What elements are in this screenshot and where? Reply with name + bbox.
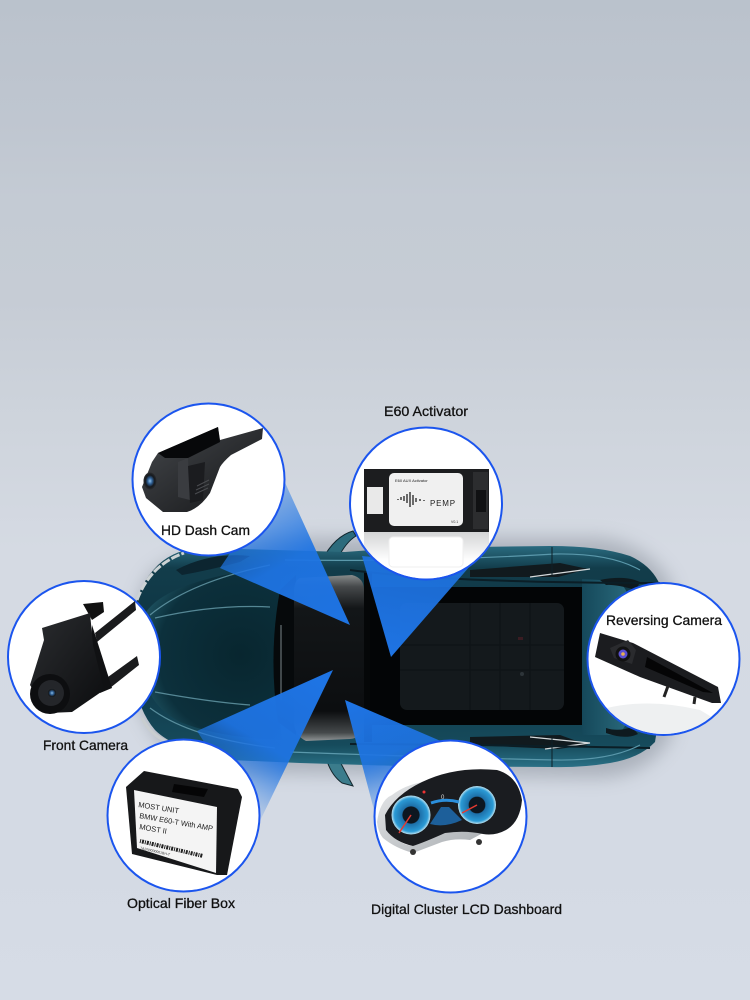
cluster housing (385, 769, 522, 846)
label: E60 Activator (384, 403, 468, 419)
circle (350, 428, 502, 580)
icon: dash cam (142, 427, 263, 512)
panel: Reversing Camera (588, 583, 740, 740)
circle (132, 404, 284, 556)
circle (108, 740, 260, 892)
label: Optical Fiber Box (127, 895, 235, 911)
icon: fiber box: MOST II (139, 822, 168, 836)
roof pillar (364, 572, 372, 742)
panel: Digital Cluster LCD Dashboard (371, 740, 562, 917)
beam: HD Dash Cam (220, 476, 350, 625)
label: HD Dash Cam (161, 522, 250, 538)
label: Front Camera (43, 737, 128, 753)
icon: front camera (30, 601, 139, 714)
label: Digital Cluster LCD Dashboard (371, 901, 562, 917)
wiper area (273, 575, 296, 735)
car top view (135, 531, 668, 786)
beam: Optical Fiber Box (197, 670, 333, 825)
roof rails (350, 570, 660, 748)
roof glass (370, 587, 582, 725)
circle (374, 740, 526, 892)
icon: activator module: PEMP (430, 499, 456, 508)
icon: activator module: V0.1 (451, 520, 458, 524)
windshield (294, 575, 364, 741)
chrome grille strip: lower (142, 718, 168, 742)
mirror: upper (322, 531, 356, 560)
icon: digital cluster (377, 769, 522, 855)
panel: Front Camera (8, 581, 160, 753)
icon: activator module (364, 469, 489, 580)
icon: digital cluster: 0 (441, 795, 445, 801)
icon: fiber box: 7A2N0000001BH-T (140, 846, 171, 857)
mirror: lower (326, 758, 353, 786)
icon: activator module: E60 AUX Activator (395, 478, 428, 483)
beam: Digital Cluster (345, 700, 450, 825)
reflection (364, 532, 489, 580)
car shadow (128, 538, 672, 778)
circle (588, 583, 740, 735)
beam: E60 Activator (362, 556, 470, 657)
hood panel (146, 570, 282, 740)
icon: reversing camera (595, 633, 721, 740)
icon: fiber box (126, 771, 242, 875)
silver trim (377, 782, 483, 853)
roof glass inner panel (400, 603, 564, 710)
panel: HD Dash Cam (132, 404, 284, 556)
car body (135, 546, 668, 767)
rear hatch (582, 579, 630, 735)
side window: upper (470, 563, 588, 577)
chrome grille strip: upper (137, 553, 184, 600)
label: Reversing Camera (606, 612, 722, 628)
panel: Optical Fiber Box (108, 740, 260, 911)
icon: fiber box: BMW E60-T With AMP (139, 811, 214, 833)
panel: E60 Activator (350, 403, 502, 580)
circle (8, 581, 160, 733)
hood crease lines (150, 565, 275, 748)
side window: lower (470, 735, 588, 749)
icon: fiber box: MOST UNIT (138, 800, 180, 815)
